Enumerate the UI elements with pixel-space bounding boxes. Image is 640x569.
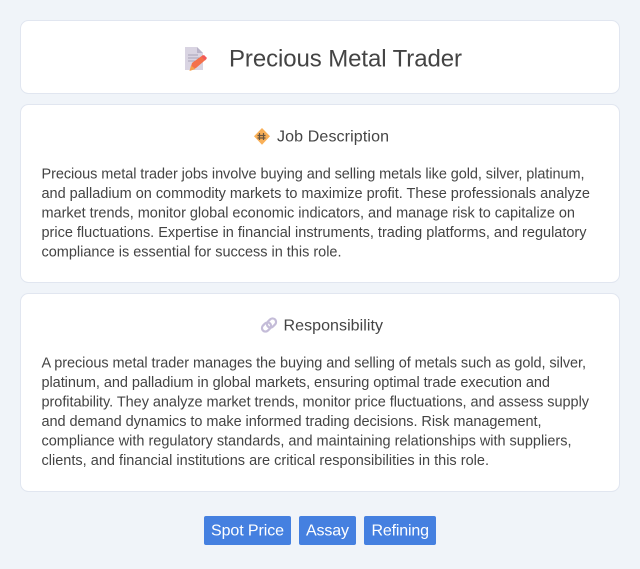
text block: responsibility: compliance with regulatory standards, and maintaining relationships with suppliers,	[42, 433, 572, 449]
panel: job description	[20, 104, 620, 282]
icon: document with pencil	[185, 47, 207, 71]
text block: job description: price fluctuations. Expertise in financial instruments, trading platforms, and regulatory	[42, 225, 587, 241]
tag: refining	[364, 516, 436, 545]
tag: assay	[299, 516, 356, 545]
panel: title	[20, 20, 620, 94]
heading: responsibility: Responsibility	[284, 317, 383, 334]
tag: spot price	[204, 516, 291, 545]
heading: job description: Job Description	[277, 128, 389, 145]
text block: job description: market trends, monitor global economic indicators, and manage risk to capitalize on	[42, 205, 575, 221]
icon: orange diamond	[254, 128, 270, 145]
text block: job description: compliance is essential for success in this role.	[42, 244, 342, 260]
tag: spot price: Spot Price	[211, 522, 284, 540]
text block: responsibility	[42, 355, 590, 469]
text block: job description: Precious metal trader jobs involve buying and selling metals like gold, silver, platinum,	[42, 166, 584, 182]
heading: page title: Precious Metal Trader	[229, 45, 462, 72]
text block: responsibility: platinum, and palladium in global markets, ensuring optimal trade execution and	[42, 375, 550, 391]
tag: assay: Assay	[306, 522, 349, 540]
text block: responsibility: and demand dynamics to make informed trading decisions. Risk management,	[42, 414, 542, 430]
text block: job description: and palladium on commodity markets to maximize profit. These professionals analyze	[42, 186, 590, 202]
text block: responsibility: A precious metal trader manages the buying and selling of metals such as gold, silver,	[42, 355, 586, 371]
text block: responsibility: clients, and financial institutions are critical responsibilities in this role.	[42, 453, 489, 469]
panel: responsibility	[20, 294, 620, 492]
text block: responsibility: profitability. They analyze market trends, monitor price fluctuations, and assess supply	[42, 394, 590, 410]
text block: job description	[42, 166, 590, 260]
tags row	[204, 516, 436, 545]
tag: refining: Refining	[372, 522, 429, 540]
icon: chain link	[260, 317, 278, 333]
